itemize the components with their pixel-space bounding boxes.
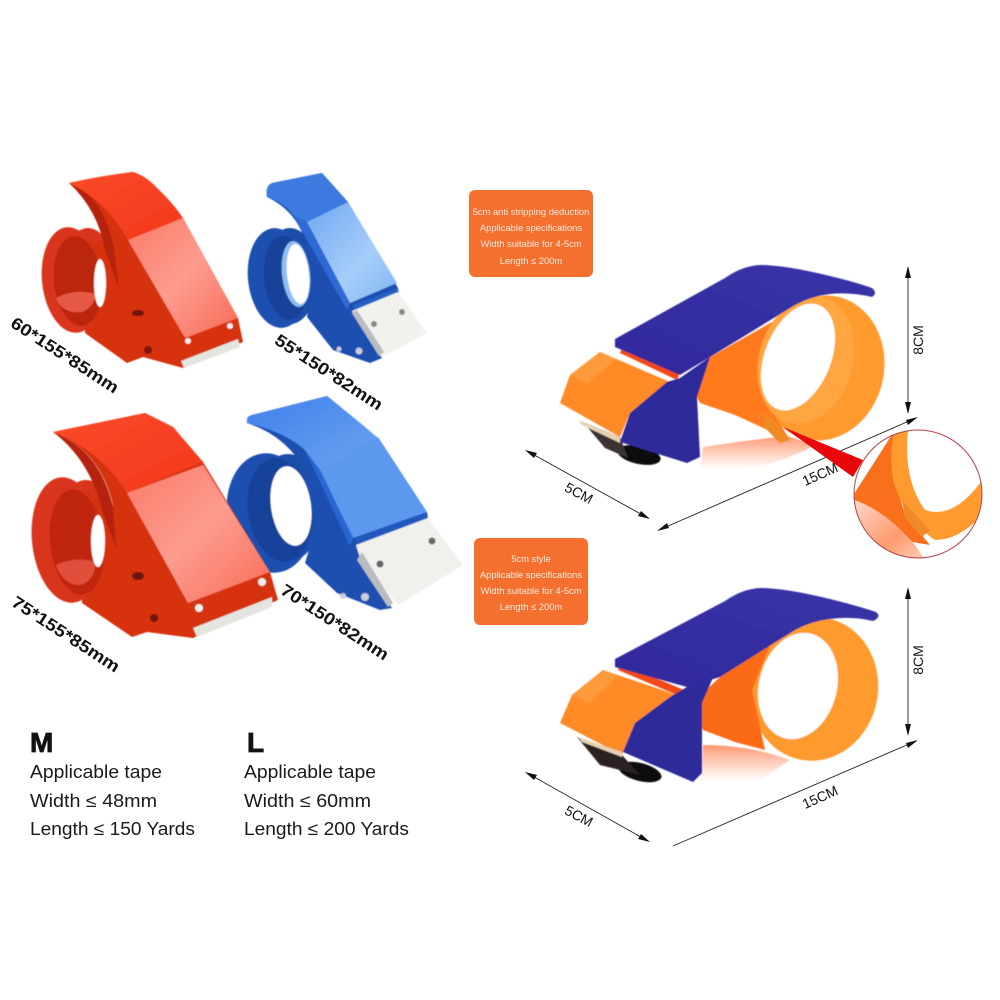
callout: 5cm style: Applicable specifications <box>480 569 582 580</box>
dimension arrow: 8CM upper <box>905 266 926 414</box>
dimension arrow: 15CM upper: 15CM <box>800 459 840 489</box>
dimension arrow: 8CM upper: 8CM <box>910 325 926 355</box>
size label: 60*155*85mm: 60*155*85mm <box>7 313 122 397</box>
spec block: size M: Width ≤ 48mm <box>30 791 157 811</box>
spec block: size L: L <box>247 727 264 758</box>
dispenser: orange and indigo 5cm style <box>560 588 890 786</box>
dispenser: red medium <box>37 172 243 368</box>
callout: 5cm anti stripping: 5cm anti stripping deduction <box>473 206 589 217</box>
callout: 5cm anti stripping: Applicable specifications <box>480 222 582 233</box>
dimension arrow: 15CM upper <box>657 417 918 531</box>
dimension arrow: 5CM upper: 5CM <box>562 479 596 507</box>
spec block: size L: Width ≤ 60mm <box>244 791 371 811</box>
size label: 55*150*82mm: 55*150*82mm <box>271 330 386 414</box>
spec block: size L: Length ≤ 200 Yards <box>244 819 409 839</box>
callout: 5cm style: Length ≤ 200m <box>500 601 562 612</box>
spec block: size M: M <box>30 727 53 758</box>
dimension arrow: 5CM lower <box>525 772 650 842</box>
dimension arrow: 5CM upper <box>525 450 650 519</box>
spec block: size L <box>244 727 409 839</box>
callout: 5cm style: 5cm style <box>511 553 551 564</box>
callout: 5cm style: Width suitable for 4-5cm <box>480 585 582 596</box>
dimension arrow: 15CM lower <box>673 740 918 846</box>
dimension arrow: 8CM lower <box>905 587 926 736</box>
spec block: size L: Applicable tape <box>244 762 376 782</box>
callout: 5cm anti stripping: Length ≤ 200m <box>500 255 562 266</box>
dispenser: orange and indigo with anti stripping <box>560 265 898 470</box>
dispenser: blue medium <box>243 173 427 363</box>
dimension arrow: 8CM lower: 8CM <box>910 645 926 675</box>
callout: 5cm anti stripping <box>469 190 593 277</box>
dimension arrow: 5CM lower: 5CM <box>562 802 596 830</box>
size label: 70*150*82mm: 70*150*82mm <box>277 580 392 664</box>
callout: 5cm anti stripping: Width suitable for 4-5cm <box>480 238 582 249</box>
callout: 5cm style <box>474 538 588 625</box>
inset: anti stripping detail <box>854 430 985 560</box>
dispenser: red large <box>26 413 278 638</box>
spec block: size M <box>30 727 195 839</box>
pointer: red wedge <box>783 427 863 477</box>
size label: 75*155*85mm: 75*155*85mm <box>8 592 123 676</box>
dispenser: blue large <box>219 396 463 610</box>
dimension arrow: 15CM lower: 15CM <box>800 782 840 812</box>
spec block: size M: Length ≤ 150 Yards <box>30 819 195 839</box>
spec block: size M: Applicable tape <box>30 762 162 782</box>
